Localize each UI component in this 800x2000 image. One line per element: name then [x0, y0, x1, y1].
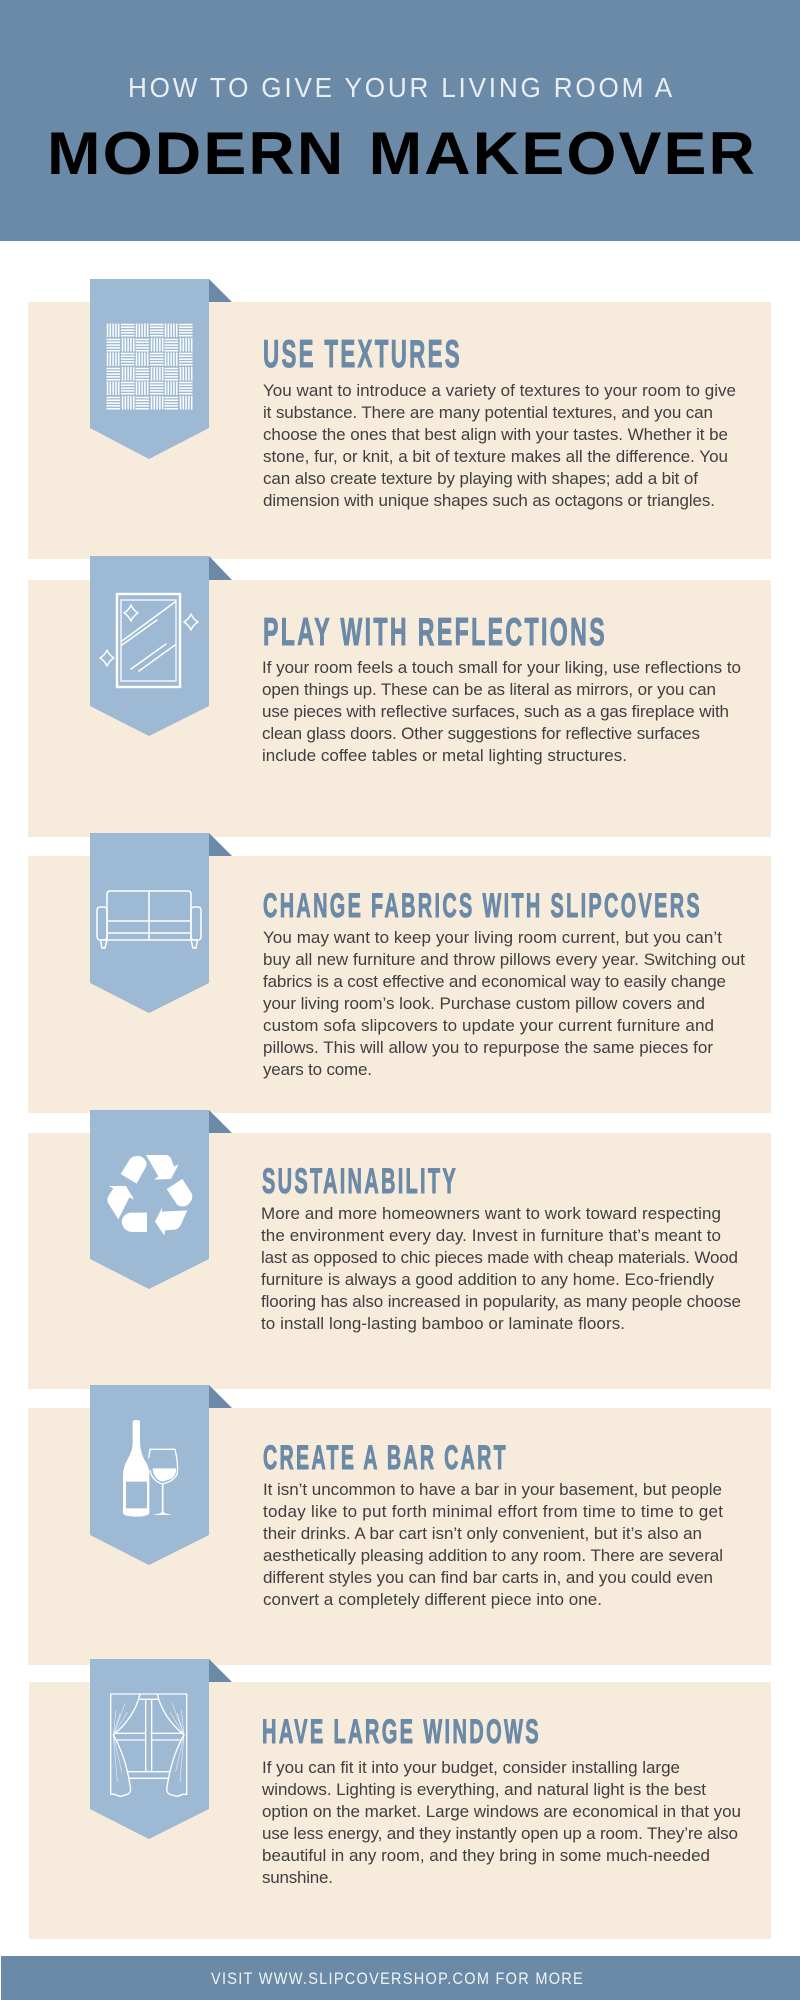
text: bar cart: It isn’t uncommon to have a bar in your basement, but people — [263, 1480, 722, 1499]
text: sustainability: the environment every day. Invest in furniture that’s meant to — [261, 1226, 721, 1245]
text: large windows: sunshine. — [262, 1868, 333, 1887]
ribbon: sustainability — [90, 1110, 232, 1289]
ribbon: play with reflections — [90, 556, 232, 736]
panel: change fabrics with slipcovers — [28, 833, 771, 1113]
ribbon: large windows — [90, 1659, 232, 1839]
text: bar cart: their drinks. A bar cart isn’t only convenient, but it’s also an — [263, 1524, 702, 1543]
text: bar cart: different styles you can find bar carts in, and you could even — [263, 1568, 713, 1587]
text: sustainability — [261, 1204, 741, 1333]
text: play with reflections: include coffee tables or metal lighting structures. — [262, 746, 627, 765]
icon: window with curtains — [111, 1694, 187, 1796]
text: bar cart: today like to put forth minimal effort from time to time to get — [263, 1502, 723, 1521]
heading: large windows: HAVE LARGE WINDOWS — [262, 1713, 541, 1751]
text: large windows: windows. Lighting is everything, and natural light is the best — [261, 1780, 706, 1799]
ribbon: bar cart — [90, 1385, 232, 1565]
panel: play with reflections — [28, 556, 771, 837]
icon: wine bottle and glass — [123, 1420, 178, 1517]
heading: use textures: USE TEXTURES — [263, 333, 462, 376]
heading: bar cart: CREATE A BAR CART — [263, 1439, 508, 1477]
text: use textures: it substance. There are many potential textures, and you can — [263, 403, 713, 422]
text: large windows: use less energy, and they instantly open up a room. They’re also — [262, 1824, 738, 1843]
icon: woven texture — [106, 323, 193, 410]
text: change fabrics: fabrics is a cost effective and economical way to easily change — [263, 972, 726, 991]
text: change fabrics: years to come. — [263, 1060, 372, 1079]
text: use textures: You want to introduce a variety of textures to your room to give — [263, 381, 736, 400]
text: sustainability: furniture is always a good addition to any home. Eco-friendly — [261, 1270, 714, 1289]
text: sustainability: last as opposed to chic pieces made with cheap materials. Wood — [261, 1248, 738, 1267]
text: change fabrics — [263, 928, 745, 1079]
text: use textures: stone, fur, or knit, a bit of texture makes all the difference. You — [263, 447, 728, 466]
text: change fabrics: You may want to keep your living room current, but you can’t — [263, 928, 722, 947]
text: sustainability: More and more homeowners want to work toward respecting — [261, 1204, 721, 1223]
text: change fabrics: buy all new furniture and throw pillows every year. Switching out — [263, 950, 745, 969]
text: bar cart — [263, 1480, 723, 1609]
text: use textures: dimension with unique shapes such as octagons or triangles. — [263, 491, 715, 510]
text: change fabrics: pillows. This will allow you to repurpose the same pieces for — [263, 1038, 713, 1057]
icon: recycle — [107, 1155, 192, 1236]
text: play with reflections — [262, 658, 741, 765]
text: use textures: choose the ones that best align with your tastes. Whether it be — [263, 425, 728, 444]
panel: sustainability — [28, 1110, 771, 1389]
text: change fabrics: your living room’s look. Purchase custom pillow covers and — [263, 994, 705, 1013]
text: play with reflections: open things up. These can be as literal as mirrors, or you can — [262, 680, 716, 699]
ribbon: change fabrics — [90, 833, 232, 1013]
text: sustainability: flooring has also increased in popularity, as many people choose — [261, 1292, 741, 1311]
text: sustainability: to install long-lasting bamboo or laminate floors. — [261, 1314, 625, 1333]
text: large windows: option on the market. Large windows are economical in that you — [262, 1802, 741, 1821]
heading: sustainability: SUSTAINABILITY — [262, 1162, 458, 1201]
footer text: VISIT WWW.SLIPCOVERSHOP.COM FOR MORE — [211, 1969, 584, 1988]
panel: have large windows — [29, 1659, 771, 1939]
text: large windows: If you can fit it into your budget, consider installing large — [262, 1758, 680, 1777]
text: large windows — [261, 1758, 741, 1887]
text: play with reflections: If your room feels a touch small for your liking, use reflections to — [262, 658, 741, 677]
subtitle: HOW TO GIVE YOUR LIVING ROOM A — [128, 72, 675, 103]
title: MODERN MAKEOVER — [47, 120, 757, 187]
text: bar cart: aesthetically pleasing addition to any room. There are several — [263, 1546, 723, 1565]
panel: use textures — [28, 279, 771, 559]
ribbon: use textures — [90, 279, 232, 459]
icon: mirror — [100, 594, 198, 687]
text: use textures — [263, 381, 736, 510]
icon: sofa — [97, 891, 201, 948]
text: play with reflections: use pieces with reflective surfaces, such as a gas fireplace with — [262, 702, 729, 721]
panel: create a bar cart — [28, 1385, 771, 1665]
text: bar cart: convert a completely different piece into one. — [263, 1590, 602, 1609]
text: change fabrics: custom sofa slipcovers to update your current furniture and — [263, 1016, 714, 1035]
text: use textures: can also create texture by playing with shapes; add a bit of — [263, 469, 698, 488]
footer bar — [1, 1956, 800, 2000]
text: large windows: beautiful in any room, and they bring in some much-needed — [262, 1846, 710, 1865]
header banner — [0, 0, 800, 241]
text: play with reflections: clean glass doors. Other suggestions for reflective surfaces — [262, 724, 700, 743]
